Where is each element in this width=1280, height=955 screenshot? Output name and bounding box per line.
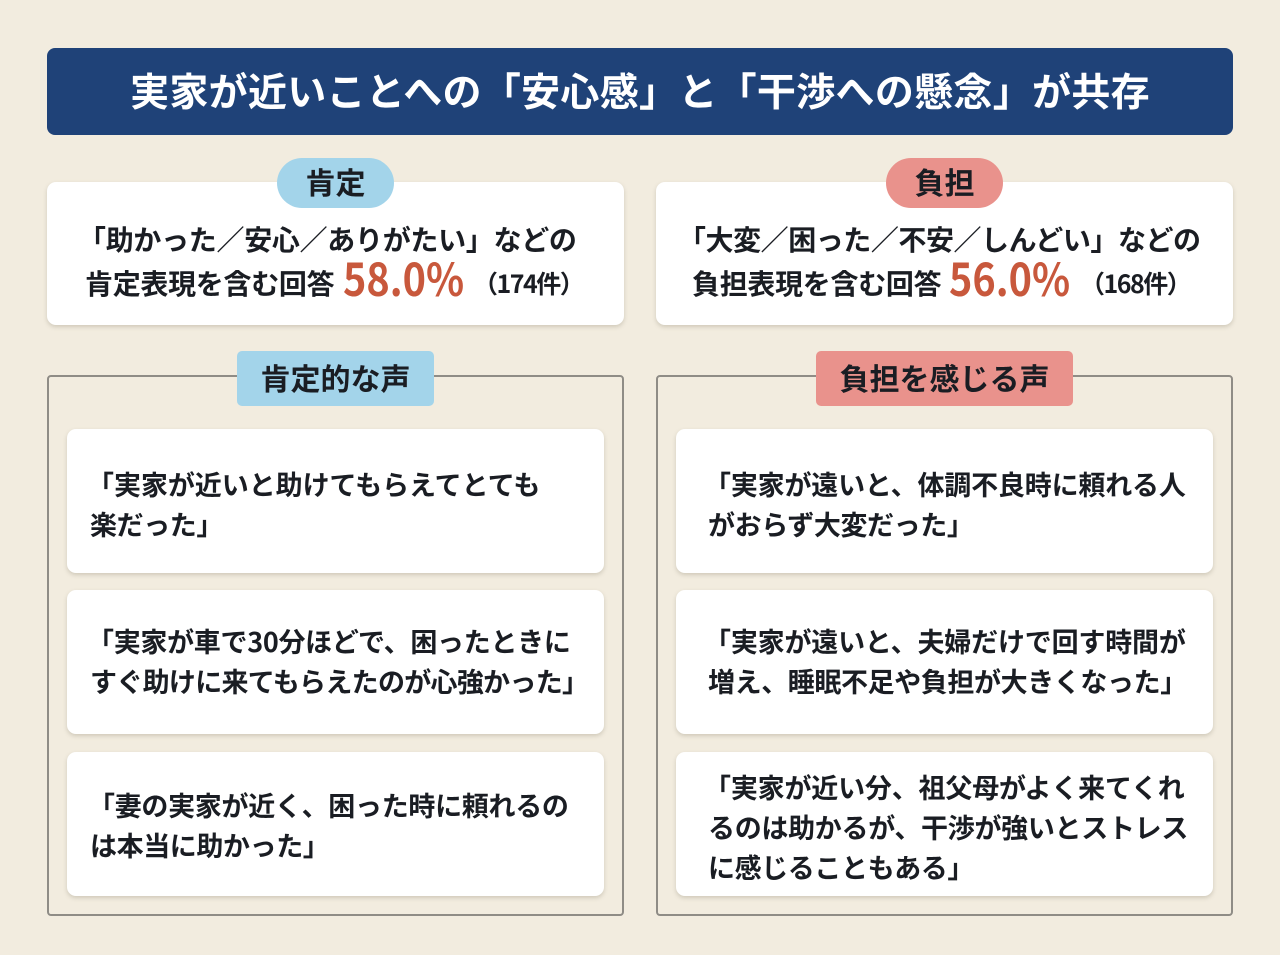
count: 174: （174件） [473, 265, 583, 301]
panel: burden summary [654, 158, 1235, 329]
badge: burden: 負担 [914, 159, 974, 203]
quote card 1 [676, 429, 1213, 573]
quote card 3: 「妻の実家が近く、困った時に頼れるの [88, 785, 569, 824]
title banner [47, 48, 1233, 135]
badge: affirmative [277, 158, 394, 208]
quote card 2: すぐ助けに来てもらえたのが心強かった」 [90, 661, 588, 700]
quote card 2: 「実家が車で30分ほどで、困ったときに [87, 621, 571, 660]
quote card 3: るのは助かるが、干渉が強いとストレス [708, 807, 1188, 846]
quote card 1: 「実家が遠いと、体調不良時に頼れる人 [704, 464, 1186, 503]
quote card 3: は本当に助かった」 [90, 825, 329, 864]
quote card 1: がおらず大変だった」 [708, 504, 973, 543]
panel: affirmative voices [47, 375, 624, 916]
badge: affirmative: 肯定 [306, 159, 366, 203]
heading: affirmative voices [237, 351, 434, 406]
summary line 1: 「助かった／安心／ありがたい」などの [78, 219, 577, 259]
summary card [47, 182, 624, 325]
summary line 2: 肯定表現を含む回答 [85, 263, 334, 303]
heading: burden voices: 負担を感じる声 [840, 355, 1050, 399]
quote card 2: 増え、睡眠不足や負担が大きくなった」 [708, 661, 1187, 700]
stat: 58.0%: 58.0% [343, 244, 464, 309]
stat: 56.0%: 56.0% [949, 244, 1070, 309]
quote card 1: 楽だった」 [90, 504, 223, 543]
quote card 2 [676, 590, 1213, 734]
title banner: 実家が近いことへの「安心感」と「干渉への懸念」が共存 [130, 62, 1150, 118]
quote card 2 [67, 590, 604, 734]
count: 168: （168件） [1080, 265, 1190, 301]
quote card 3 [67, 752, 604, 896]
quote card 3: 「実家が近い分、祖父母がよく来てくれ [704, 767, 1185, 806]
summary line 1: 「大変／困った／不安／しんどい」などの [678, 219, 1201, 259]
quote card 2: 「実家が遠いと、夫婦だけで回す時間が [704, 621, 1186, 660]
heading: burden voices [816, 351, 1073, 406]
badge: burden [886, 158, 1003, 208]
summary card [656, 182, 1233, 325]
quote card 3 [676, 752, 1213, 896]
heading: affirmative voices: 肯定的な声 [260, 355, 410, 399]
quote card 3: に感じることもある」 [708, 847, 974, 886]
quote card 1: 「実家が近いと助けてもらえてとても [87, 464, 540, 503]
quote card 1 [67, 429, 604, 573]
summary line 2: 負担表現を含む回答 [692, 263, 941, 303]
panel: affirmative summary [45, 158, 626, 329]
panel: burden voices [656, 375, 1233, 916]
